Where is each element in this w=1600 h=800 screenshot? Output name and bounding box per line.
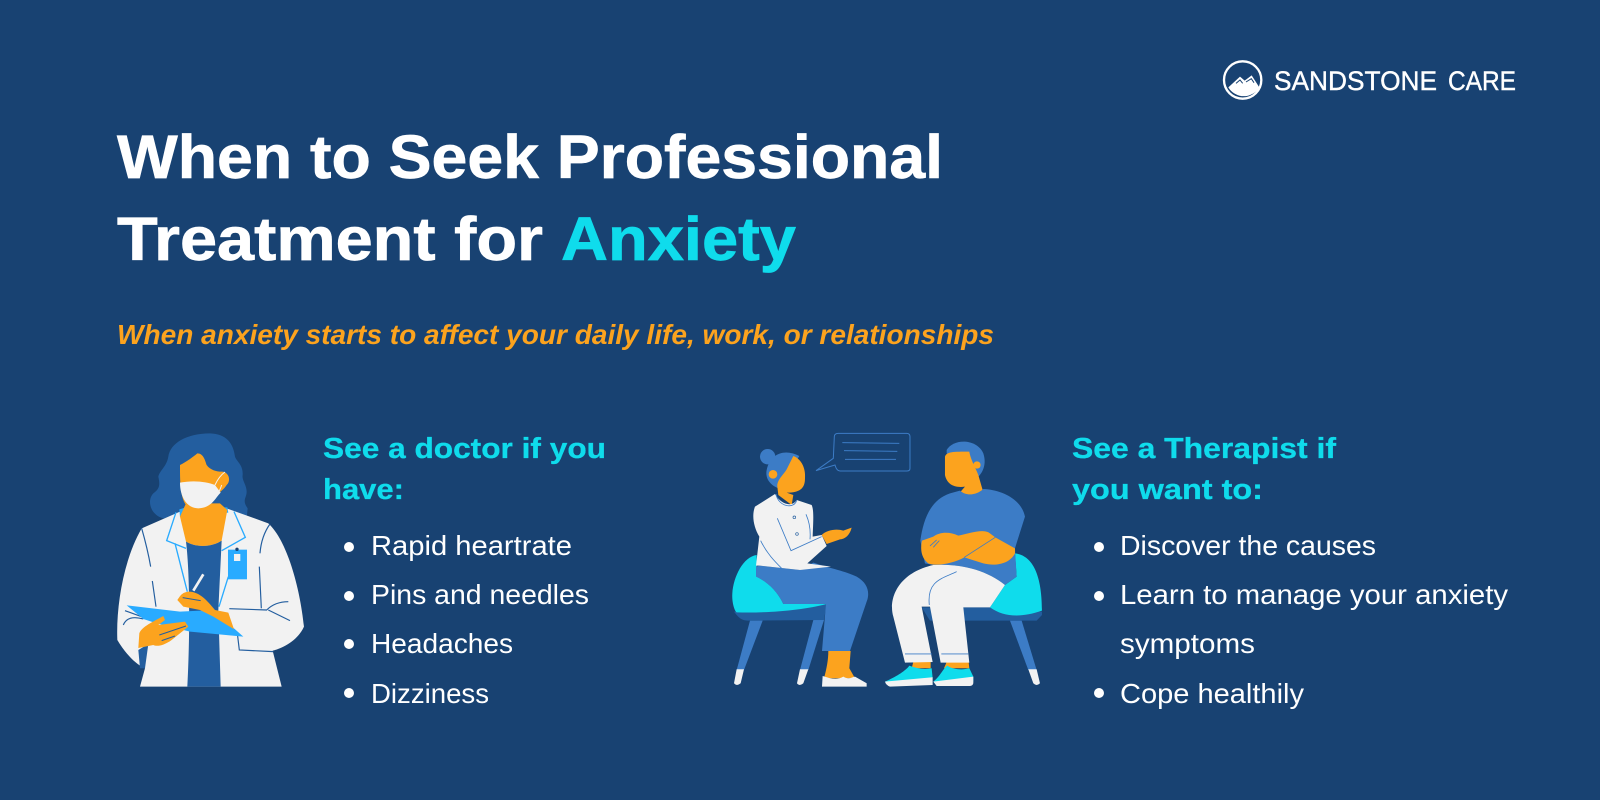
heading: see a doctor: have: <box>323 474 404 506</box>
list: doctor symptoms: Headaches <box>371 628 513 659</box>
therapist figure and chair <box>732 449 868 687</box>
title <box>117 123 943 273</box>
illustration: therapy session <box>732 433 1042 687</box>
heading: see a therapist: See a Therapist if <box>1072 433 1337 465</box>
list: therapist goals <box>1094 530 1508 709</box>
logo: Sandstone Care: CARE <box>1448 66 1516 96</box>
list: therapist goals: Discover the causes <box>1120 530 1376 561</box>
heading: see a doctor: See a doctor if you <box>323 433 606 465</box>
list: doctor symptoms <box>344 530 589 709</box>
subtitle: When anxiety starts to affect your daily life, work, or relationships <box>117 319 994 350</box>
illustration: doctor <box>117 433 304 687</box>
logo: Sandstone Care <box>1224 61 1516 99</box>
list: doctor symptoms: Pins and needles <box>371 579 589 610</box>
list: therapist goals: Learn to manage your anxiety <box>1120 579 1508 610</box>
list: therapist goals: symptoms <box>1120 628 1255 659</box>
list: doctor symptoms: Rapid heartrate <box>371 530 572 561</box>
list: therapist goals: Cope healthily <box>1120 678 1304 709</box>
logo icon: mountain in circle <box>1224 61 1261 99</box>
speech bubble <box>816 433 910 471</box>
heading: see a doctor <box>323 433 606 506</box>
client figure and chair <box>885 442 1042 687</box>
list: doctor symptoms: Dizziness <box>371 678 489 709</box>
title: Treatment for <box>117 205 543 273</box>
title: When to Seek Professional <box>117 123 943 191</box>
heading: see a therapist <box>1072 433 1337 506</box>
title: Anxiety <box>561 205 796 273</box>
logo: Sandstone Care: SANDSTONE <box>1274 66 1437 96</box>
heading: see a therapist: you want to: <box>1072 474 1263 506</box>
